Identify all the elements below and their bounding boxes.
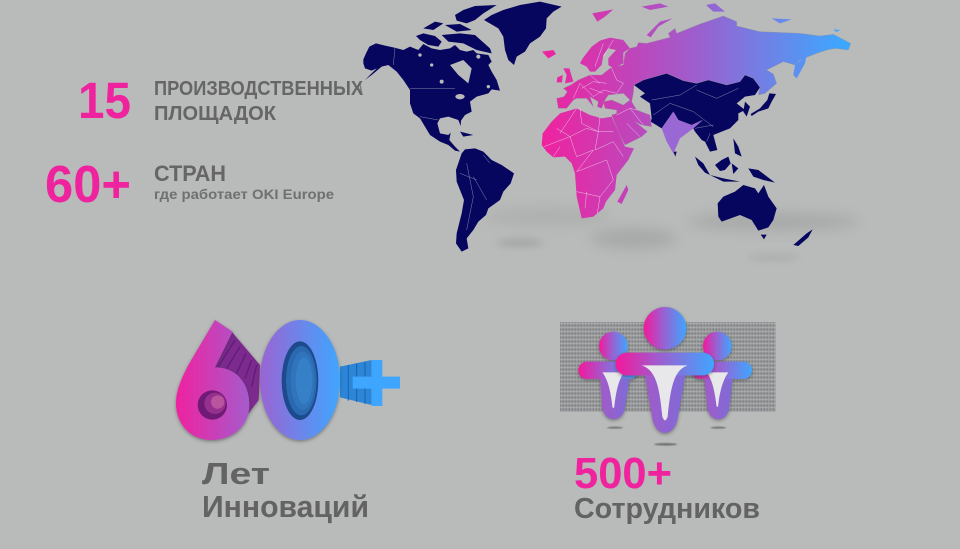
digit 6 [176, 320, 249, 440]
stat: 15 production sites [78, 72, 363, 129]
six extrusion [210, 332, 260, 413]
center figure [616, 307, 714, 433]
hole of digit 6 [198, 390, 227, 420]
India [662, 112, 703, 153]
digit 0 [260, 320, 340, 440]
Africa [542, 108, 634, 218]
number 60+: 60+ [45, 156, 131, 214]
number 500+: 500+ [574, 449, 672, 498]
icon: employees group [560, 307, 776, 446]
label: production sites: ПРОИЗВОДСТВЕННЫХ [154, 77, 363, 100]
stat: 500+ employees [574, 449, 760, 525]
world map [360, 2, 860, 261]
icon: 3D 60+ years [176, 320, 400, 440]
label: years of innovation [202, 456, 369, 524]
hole of digit 0 [282, 341, 318, 420]
label: production sites: ПЛОЩАДОК [154, 102, 276, 125]
left figure [578, 332, 638, 419]
Europe, Russia, Middle East gradient region [557, 16, 851, 145]
Americas, Greenland, Asia-Pacific in navy [363, 2, 813, 252]
plus extrusion [340, 360, 372, 405]
label: production sites [154, 77, 363, 125]
plus sign [353, 360, 400, 406]
stat: 60+ countries [45, 156, 334, 214]
number 15: 15 [78, 72, 131, 129]
label: years of innovation: Инноваций [202, 489, 369, 524]
islands: Scandinavia, Iceland, Britain, Madagascar, Svalbard, Novaya Zemlya, Arctic Russia, Kamchatka [542, 3, 841, 204]
dotted backdrop [560, 322, 776, 412]
map ground shadows [483, 208, 860, 261]
label: employees: Сотрудников [574, 493, 760, 525]
sublabel: where OKI Europe works: где работает OKI Europe [154, 186, 334, 202]
country borders [544, 40, 643, 213]
label: years of innovation: Лет [202, 456, 270, 491]
right figure [692, 332, 752, 419]
stray gray marker [360, 81, 363, 95]
Hudson Bay and lake cutouts [418, 53, 490, 99]
label: countries: СТРАН [154, 161, 226, 186]
figure shadows [607, 427, 726, 446]
